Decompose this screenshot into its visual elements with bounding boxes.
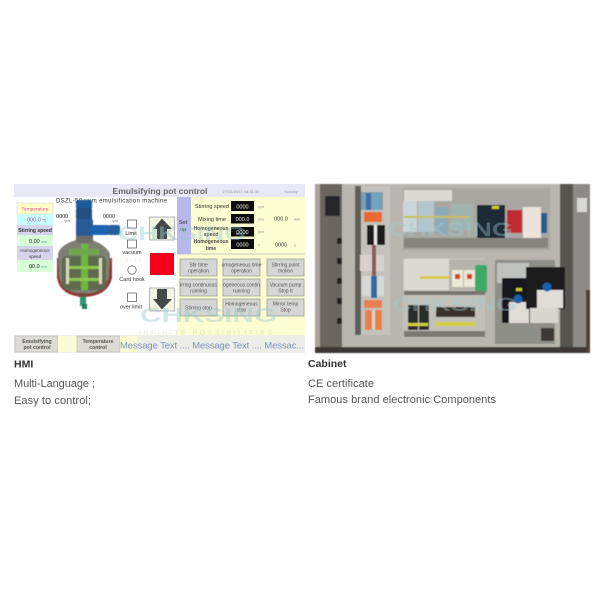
panel: set up (177, 197, 305, 335)
limit indicators: over limit (120, 304, 142, 310)
bottom bar (14, 335, 305, 353)
watermark: CHKSING (388, 220, 513, 241)
HMI title bar: Sunday (284, 189, 298, 194)
panel: set up: up (180, 227, 186, 233)
bottom bar: pot control (23, 345, 51, 351)
HMI title bar: Emulsifying pot control (113, 186, 207, 196)
readout column: Stirring speed (18, 228, 52, 234)
panel: set up: min (294, 218, 300, 222)
lower left plate (403, 258, 487, 338)
text block: HMI features: Multi-Language ; (14, 378, 95, 390)
text block: Cabinet features: CE certificate (308, 378, 374, 390)
text block: HMI features: Easy to control; (14, 395, 91, 407)
cabinet frame and door (315, 184, 590, 353)
watermark (388, 220, 517, 316)
control buttons grid (180, 259, 304, 316)
control buttons grid: running (190, 288, 207, 294)
rpm readouts (56, 214, 118, 223)
panel: set up: Homogeneous (194, 226, 229, 232)
limit indicators: Card hook (119, 277, 145, 283)
icon: emulsifying pot (57, 200, 120, 309)
control buttons grid: Stirring stop (185, 306, 212, 312)
readout column: Temperature (22, 206, 49, 212)
control buttons grid: Homogeneous (225, 302, 258, 308)
panel: set up: 0000 (236, 242, 249, 248)
panel: set up: Set (179, 220, 188, 226)
rpm readouts: 0000 (103, 214, 115, 220)
readout column: 0.00 m/s (29, 239, 47, 245)
panel: set up: Stirring speed (195, 204, 229, 210)
text block: Cabinet features (308, 378, 496, 406)
panel: set up: speed (204, 232, 218, 238)
bottom bar: Message Text .... Message Text .... Messac... (120, 340, 304, 352)
panel: set up: s (258, 243, 260, 247)
control buttons grid: Stop It (278, 288, 293, 294)
control buttons grid: Mirror temp (273, 302, 298, 308)
readout column: speed (29, 254, 42, 259)
watermark: CHKSING (140, 305, 277, 327)
panel: HMI screenshot (14, 184, 305, 353)
panel: set up: min (258, 218, 264, 222)
panel: set up: Mixing time (198, 217, 226, 223)
control buttons grid: Stir time (189, 262, 208, 268)
panel: set up: rpm (258, 230, 264, 234)
panel: set up: time (206, 246, 216, 252)
icon: blue motor (76, 200, 120, 236)
watermark (107, 224, 277, 337)
panel: cabinet photo (315, 184, 590, 353)
machine name: DSZL-50 uum emulsification machine (56, 198, 168, 204)
bottom bar: control (89, 345, 107, 351)
bottom bar: Temperature (82, 339, 114, 345)
control buttons grid: running (233, 288, 250, 294)
red status block (150, 253, 174, 275)
left terminal strip (355, 186, 390, 335)
readout column: Homogeneous (20, 248, 50, 253)
lower right drives (495, 260, 565, 344)
watermark: INFINITE POSSIBILITIES (139, 330, 275, 337)
control buttons grid: Stop (280, 308, 291, 314)
limit indicators: Limit (125, 231, 137, 237)
readout column: 000.0 ℃ (27, 218, 47, 224)
control buttons grid: ogeneous contin (223, 282, 260, 288)
rpm readouts: rpm (64, 219, 70, 223)
readout column (17, 203, 53, 272)
control buttons grid: motion (278, 268, 293, 274)
readout column: 00.0 m/s (29, 264, 47, 270)
rpm readouts: rpm (112, 219, 118, 223)
panel: set up: Homogeneous (194, 239, 229, 245)
panel: set up: 0000 (236, 204, 249, 210)
control buttons grid: operation (188, 268, 209, 274)
control buttons grid: irring continuous (180, 282, 217, 288)
watermark: CHKSING (392, 295, 517, 316)
panel: set up: 0000 (236, 230, 249, 236)
panel: set up: rpm (258, 205, 264, 209)
up arrow button (150, 217, 174, 240)
rpm readouts: 0000 (56, 214, 68, 220)
heading: HMI: HMI (14, 358, 33, 370)
limit indicators (119, 220, 145, 310)
text block: Cabinet features: Famous brand electronic Components (308, 394, 496, 406)
panel: set up: 000.0 (274, 216, 288, 222)
watermark: INFINITE (107, 258, 144, 264)
text block: HMI features (14, 378, 95, 407)
control buttons grid: Stirring point (271, 262, 300, 268)
upper control plate (403, 188, 550, 250)
limit indicators: vacuum (122, 250, 142, 256)
panel: set up: 0000 (275, 242, 287, 248)
HMI title bar (14, 184, 305, 197)
control buttons grid: stop (237, 308, 246, 314)
panel: set up: 000.0 (236, 217, 249, 223)
bottom bar: Emulsifying (22, 339, 52, 345)
heading: Cabinet: Cabinet (308, 358, 347, 370)
control buttons grid: omogeneous time (222, 262, 262, 268)
control buttons grid: Vacuum pump (270, 282, 302, 288)
watermark: CHKSING (118, 224, 246, 245)
control buttons grid: operation (231, 268, 252, 274)
HMI title bar: 27/01/2017 08:31:30 (223, 189, 260, 194)
panel: set up: s (294, 244, 296, 248)
down arrow button (150, 288, 174, 311)
